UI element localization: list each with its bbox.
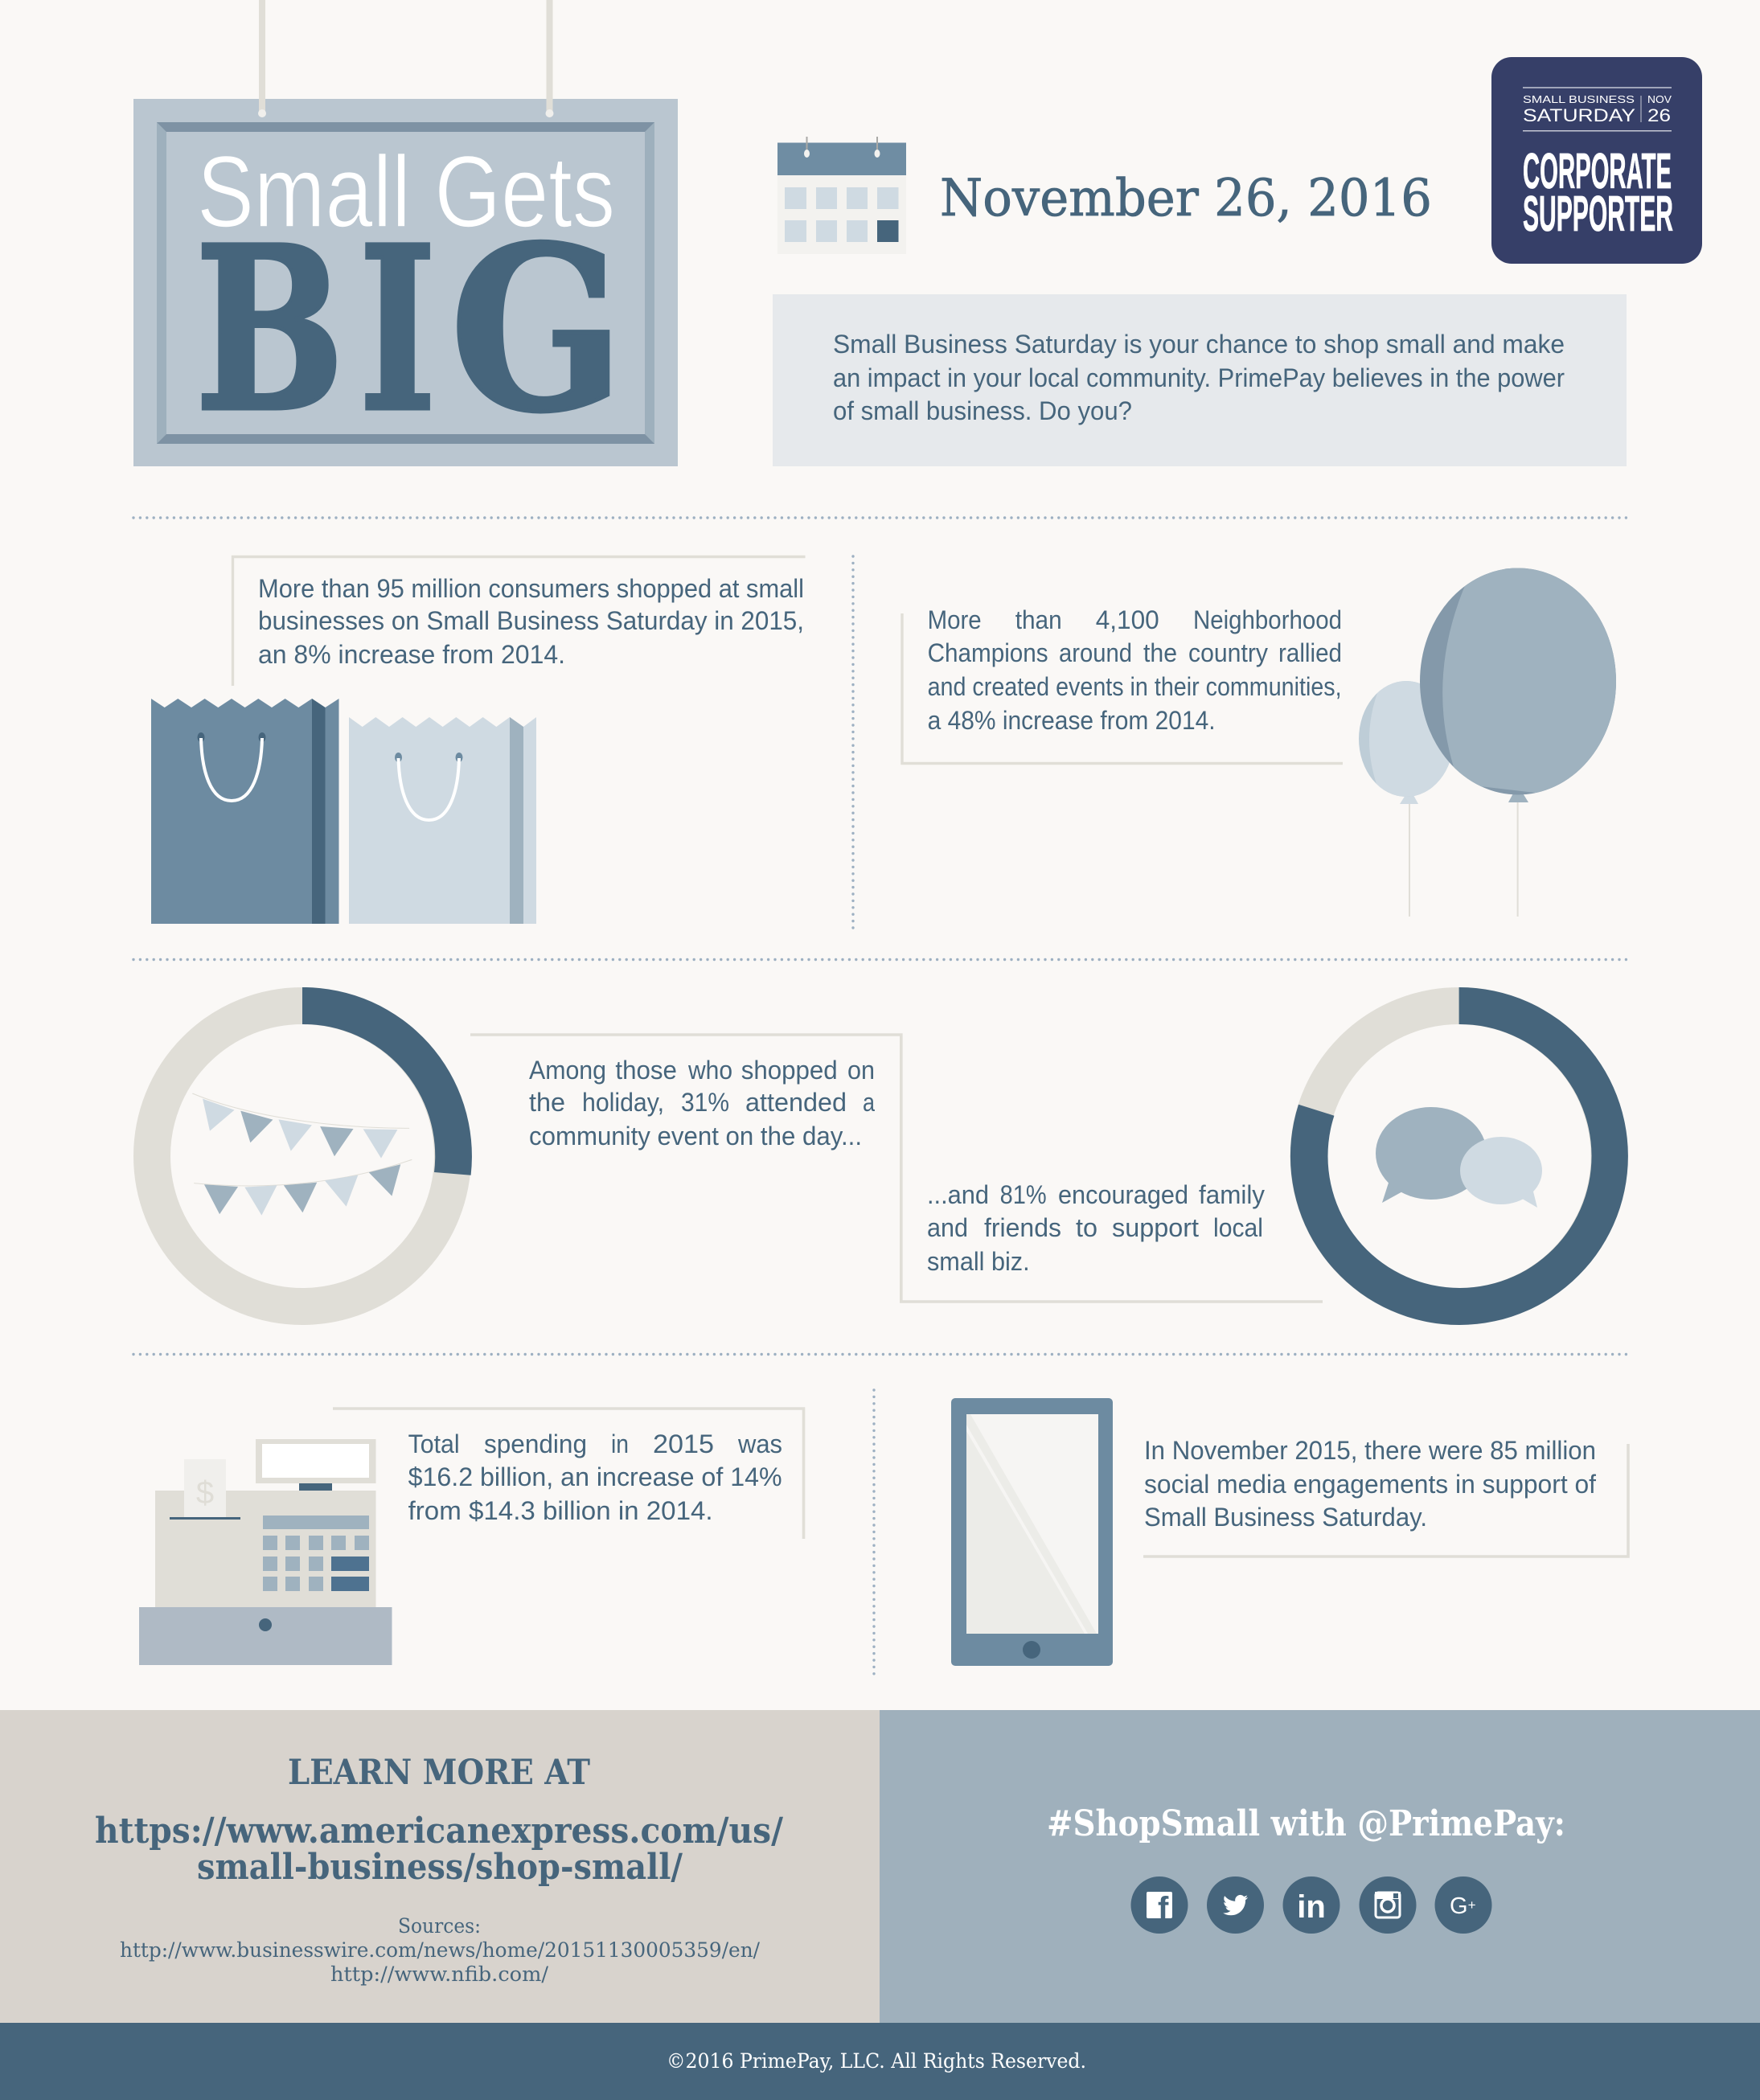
stat: 81% encouraged: small biz. [927, 1247, 1030, 1276]
heading: learn more at: LEARN MORE AT [288, 1753, 590, 1793]
stat: 81% encouraged: encouraged [1058, 1180, 1188, 1209]
sign frame [157, 122, 654, 444]
stat: 31% attended: Among [529, 1056, 606, 1085]
stat: total spending: Total [408, 1429, 460, 1458]
stat: total spending: 2015 [653, 1429, 714, 1458]
icon: google plus: G [1450, 1893, 1468, 1919]
stat: neighborhood champions: More [928, 605, 982, 634]
stat: 81% encouraged: family [1199, 1180, 1265, 1209]
stat: total spending: from $14.3 billion in 2014. [408, 1496, 713, 1525]
stat: neighborhood champions: rallied [1278, 638, 1342, 667]
stat: 81% encouraged: friends [984, 1213, 1061, 1242]
stat: neighborhood champions: Neighborhood [1193, 605, 1342, 634]
icon: linkedin [1283, 1876, 1339, 1934]
icon: light shopping bag [349, 717, 536, 924]
icon: dark shopping bag [151, 699, 339, 924]
sign strings [258, 0, 553, 117]
stat: 81% encouraged [927, 1180, 1265, 1276]
hanging sign [133, 0, 678, 466]
badge: corporate supporter: SATURDAY [1523, 105, 1635, 125]
stat: neighborhood champions: a 48% increase from 2014. [928, 706, 1216, 735]
stat: social media engagements: In November 2015, there were 85 million [1144, 1436, 1596, 1465]
footer [0, 2023, 1760, 2100]
icon: calendar [777, 137, 906, 254]
stat: 31% attended: who [687, 1056, 732, 1085]
stat: 81% encouraged: ...and [927, 1180, 989, 1209]
sources [120, 1914, 761, 1986]
icon: google plus [1434, 1876, 1492, 1934]
badge: corporate supporter: NOV [1647, 93, 1672, 105]
badge: corporate supporter: 26 [1647, 105, 1671, 125]
stat: 81% encouraged: and [927, 1213, 968, 1242]
icon: cash register [139, 1439, 392, 1665]
stat: 95 million consumers: More than 95 million consumers shopped at small [258, 574, 804, 603]
intro panel: Small Business Saturday is your chance to shop small and make [833, 330, 1565, 359]
title: BIG: G [450, 198, 624, 462]
stat: total spending: was [737, 1429, 782, 1458]
icon: cash register: $ [196, 1475, 214, 1511]
title: BIG: B [195, 198, 344, 462]
stat: 31% attended: community event on the day... [529, 1122, 862, 1150]
stat: total spending: in [611, 1429, 629, 1458]
title: Small Gets: Small Gets [197, 135, 615, 248]
icon: facebook: f [1158, 1891, 1169, 1926]
chart: 81% donut [1290, 987, 1628, 1325]
intro panel: an impact in your local community. PrimePay believes in the power [833, 363, 1565, 392]
stat: neighborhood champions: 4,100 [1096, 605, 1159, 634]
stat: neighborhood champions: Champions [928, 638, 1048, 667]
link: american express: https://www.americanexpress.com/us/ [95, 1811, 784, 1852]
stat: total spending: $16.2 billion, an increase of 14% [408, 1462, 782, 1491]
icon: speech bubbles [1376, 1107, 1542, 1208]
stat: 95 million consumers: an 8% increase from 2014. [258, 640, 565, 669]
stat: 95 million consumers [233, 556, 806, 686]
icon: twitter [1207, 1876, 1264, 1934]
stat: total spending [333, 1409, 804, 1539]
intro panel: of small business. Do you? [833, 396, 1132, 425]
chart: 31% donut [152, 987, 472, 1306]
stat: 81% encouraged: 81% [1000, 1180, 1047, 1209]
stat: 31% attended: a [863, 1088, 875, 1117]
stat: neighborhood champions: than [1015, 605, 1062, 634]
icon: tablet [951, 1398, 1113, 1666]
stat: 31% attended: 31% [681, 1088, 729, 1117]
stat: social media engagements [1143, 1436, 1628, 1557]
panel: learn more [0, 1710, 880, 2023]
sources: Sources: [398, 1914, 481, 1938]
stat: 31% attended: holiday, [582, 1088, 664, 1117]
connector frame between donuts [470, 1035, 1323, 1302]
stat: 31% attended: those [615, 1056, 677, 1085]
icon: bunting [192, 1093, 412, 1216]
hashtag heading: #ShopSmall with @PrimePay: [1047, 1803, 1565, 1844]
icon: balloons [1359, 563, 1632, 917]
stat: 31% attended: the [529, 1088, 565, 1117]
badge: corporate supporter: SMALL BUSINESS [1523, 93, 1635, 105]
link: american express: small-business/shop-small/ [197, 1847, 683, 1888]
stat: neighborhood champions: and created events in their communities, [928, 672, 1342, 701]
stat: 31% attended [529, 1056, 875, 1150]
stat: social media engagements: social media engagements in support of [1144, 1470, 1596, 1499]
badge: corporate supporter [1491, 57, 1702, 264]
intro panel [773, 294, 1627, 466]
stat: 31% attended: shopped [741, 1056, 838, 1085]
sources: http://www.nfib.com/ [330, 1963, 549, 1986]
stat: neighborhood champions: the [1143, 638, 1177, 667]
icon: facebook [1130, 1876, 1188, 1934]
stat: total spending: spending [484, 1429, 587, 1458]
stat: neighborhood champions: country [1188, 638, 1268, 667]
stat: 81% encouraged: support [1112, 1213, 1199, 1242]
title: BIG: I [359, 198, 436, 462]
stat: 81% encouraged: local [1213, 1213, 1263, 1242]
panel: social [880, 1710, 1760, 2023]
stat: social media engagements: Small Business Saturday. [1144, 1503, 1427, 1532]
icon: google plus: + [1468, 1897, 1476, 1913]
stat: neighborhood champions: around [1059, 638, 1132, 667]
footer: ©2016 PrimePay, LLC. All Rights Reserved. [667, 2049, 1086, 2073]
title: BIG [195, 198, 624, 462]
stat: 31% attended: attended [745, 1088, 847, 1117]
date heading: November 26, 2016 [940, 169, 1432, 228]
link: american express [95, 1811, 784, 1888]
stat: 31% attended: on [847, 1056, 875, 1085]
icon: linkedin: in [1297, 1889, 1326, 1925]
stat: 95 million consumers: businesses on Small Business Saturday in 2015, [258, 606, 804, 635]
stat: neighborhood champions [902, 605, 1343, 764]
sources: http://www.businesswire.com/news/home/20151130005359/en/ [120, 1938, 761, 1962]
stat: 81% encouraged: to [1076, 1213, 1097, 1242]
icon: instagram [1359, 1876, 1417, 1934]
